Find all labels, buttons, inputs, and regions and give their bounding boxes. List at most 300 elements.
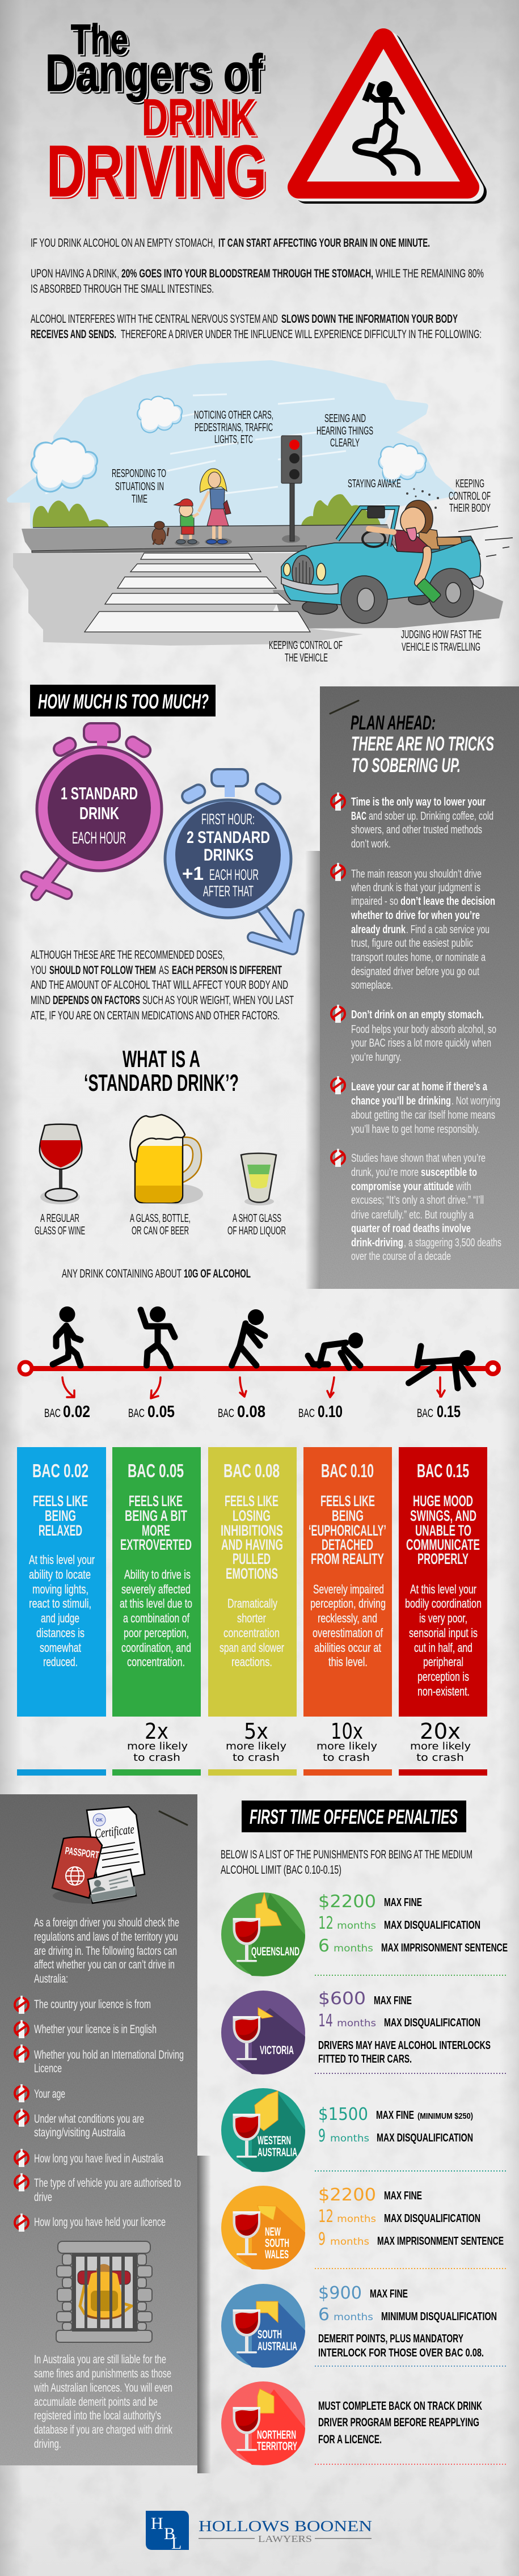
state: Queensland: $2200 [318,1892,376,1912]
recommended doses text: EACH PERSON IS DIFFERENT [172,964,282,977]
factors list: Your age [34,2088,65,2101]
female clock: one standard drink: DRINK [79,803,119,823]
foreign driver intro: are driving in. The following factors can [34,1945,177,1958]
column: BAC 0.05: Ability to drive is [124,1567,191,1582]
bushes [33,494,381,527]
recommended doses text: MIND [31,994,50,1007]
column: BAC 0.08 [208,1447,297,1717]
state: Victoria: FITTED TO THEIR CARS. [318,2053,412,2065]
crash: 5x [226,1719,286,1764]
icon: passport, certificate and licence: PASSPORT [64,1845,100,1861]
crash: 5x: to crash [233,1752,280,1764]
badge: New South Wales: SOUTH [265,2237,289,2250]
crash: 2x: 2x [145,1719,168,1744]
column: BAC 0.15: HUGE MOOD [413,1493,473,1510]
column: BAC 0.08: PULLED [233,1550,271,1567]
recommended doses text: ALTHOUGH THESE ARE THE RECOMMENDED DOSES, [31,948,225,962]
recommended doses text [31,948,294,1022]
tip: leave the car [331,1076,500,1136]
title: The [71,16,128,63]
heading: what is a standard drink: ‘STANDARD DRINK’? [84,1069,239,1096]
intro text: IS ABSORBED THROUGH THE SMALL INTESTINES. [31,283,214,296]
column: BAC 0.05: BAC 0.05 [128,1460,184,1481]
panel heading: PLAN AHEAD: [351,712,436,734]
column: BAC 0.05: at this level due to [120,1596,192,1610]
recommended doses text: YOU [31,964,47,977]
tip: leave the car: chance you’ll be drinking [351,1094,451,1107]
state: New South Wales: $2200 [318,2185,376,2205]
drink captions: GLASS OF WINE [35,1225,85,1237]
icon: wine glass [40,1124,82,1204]
scene labels: TIME [132,493,147,505]
column: BAC 0.08: BAC 0.08 [223,1460,280,1481]
column: BAC 0.05: BEING A BIT [125,1507,187,1524]
badge: Western Australia: AUSTRALIA [258,2146,297,2159]
column: BAC 0.05: MORE [142,1522,170,1539]
crosswalk [85,553,310,632]
factors list: Whether you hold an International Driving [34,2048,184,2061]
column: BAC 0.02: FEELS LIKE [33,1493,88,1510]
badge: Northern Territory: TERRITORY [257,2440,297,2453]
crash: 10x [317,1719,377,1764]
column: BAC 0.02: reduced. [43,1655,78,1669]
column: BAC 0.15: PROPERLY [417,1550,469,1567]
logo wordmark: LAWYERS [258,2533,312,2544]
column: BAC 0.08: FEELS LIKE [225,1493,279,1510]
column: BAC 0.08: span and slower [220,1641,284,1655]
factors list: How long you have held your licence [34,2216,166,2229]
crash: 20x: more likely [410,1740,471,1752]
badge: Northern Territory: NORTHERN [257,2429,296,2442]
crash: 20x: 20x [420,1719,461,1744]
column: BAC 0.10: this level. [328,1655,368,1669]
foreign driver liability text: same fines and punishments as those [34,2367,171,2380]
state: New South Wales: months [337,2214,376,2225]
column: BAC 0.02: ability to locate [29,1567,91,1582]
column: BAC 0.08: Dramatically [227,1596,277,1610]
column: BAC 0.15 [399,1447,487,1717]
factors list: Under what conditions you are [34,2113,144,2126]
tip: studies: compromise your attitude [351,1180,454,1193]
column: BAC 0.02: RELAXED [39,1522,82,1539]
BAC labels: 0.08 [237,1403,265,1421]
column: BAC 0.08: EMOTIONS [226,1565,278,1582]
badge: South Australia: SOUTH [258,2328,282,2341]
intro text: 20% GOES INTO YOUR BLOODSTREAM THROUGH THE STOMACH, [121,267,373,280]
colour key bars [17,1769,487,1776]
state: Queensland: months [334,1943,373,1954]
column: BAC 0.10: recklessly, and [318,1611,377,1625]
state: Victoria: $600 [318,1989,366,2009]
column: BAC 0.08: reactions. [231,1655,272,1669]
column: BAC 0.10: BAC 0.10 [321,1460,374,1481]
state: Queensland: 6 [318,1936,330,1956]
tip: studies: with [455,1180,471,1193]
column: BAC 0.15: SWINGS, AND [410,1507,476,1524]
column: BAC 0.15: BAC 0.15 [417,1460,469,1481]
foreign driver intro: regulations and laws of the territory you [34,1930,178,1943]
column: BAC 0.15: perception is [417,1669,469,1684]
BAC labels: 0.15 [437,1403,461,1421]
factors list: Whether your licence is in English [34,2023,157,2036]
badge: South Australia: AUSTRALIA [258,2340,297,2353]
scene labels: NOTICING OTHER CARS, [194,409,273,421]
state: Queensland: MAX FINE [384,1896,422,1909]
foreign driver liability text: database if you are charged with drink [34,2423,172,2436]
badge: Victoria: VICTORIA [260,2044,294,2057]
state: Western Australia: MAX FINE [376,2109,414,2122]
column: BAC 0.15: cut in half, and [414,1641,472,1655]
logo wordmark: HOLLOWS BOONEN [199,2518,372,2535]
icon: passport, certificate and licence [52,1807,145,1904]
warning sign: drunk stick figure [299,40,475,192]
tip: studies: quarter of road deaths involve [351,1222,471,1235]
figure: bac 0.05 [141,1306,175,1366]
column: BAC 0.05: severely affected [121,1582,191,1596]
state: Northern Territory: FOR A LICENCE. [318,2433,382,2446]
title: DRIVING [47,130,267,212]
recommended doses text: DEPENDS ON FACTORS [53,994,140,1007]
scene labels: CLEARLY [330,437,360,449]
state: Victoria: months [337,2018,376,2029]
column: BAC 0.10: FEELS LIKE [320,1493,375,1510]
state: Western Australia [221,2088,507,2172]
penalties intro [221,1848,472,1877]
column: BAC 0.15: UNABLE TO [415,1522,471,1539]
crash: 10x: more likely [317,1740,377,1752]
column: BAC 0.05: concentration. [127,1655,185,1669]
BAC labels [44,1403,461,1421]
foreign driver liability text: driving. [34,2438,61,2451]
state: Queensland: MAX DISQUALIFICATION [384,1919,480,1932]
intro text: IF YOU DRINK ALCOHOL ON AN EMPTY STOMACH, [31,237,215,250]
column: BAC 0.10: BEING [332,1507,364,1524]
male clock: two standard drinks: DRINKS [204,846,254,865]
scene labels: KEEPING [455,478,484,490]
badge: Northern Territory [221,2381,305,2465]
tip: judgment: someplace. [351,979,393,992]
tip: time [331,792,493,850]
tip: time: BAC [351,810,366,823]
foreign driver liability text: accumulate demerit points and be [34,2396,158,2409]
state: New South Wales: MAX FINE [384,2190,422,2202]
crash: 20x [410,1719,471,1764]
crash: 5x: 5x [244,1719,268,1744]
badge: South Australia [221,2284,305,2368]
logo mark: B [164,2524,175,2543]
scene labels: KEEPING CONTROL OF [269,639,343,652]
column: BAC 0.15: COMMUNICATE [406,1536,480,1553]
column: BAC 0.05 [112,1447,201,1717]
BAC labels: 0.05 [147,1403,175,1421]
factors list: The type of vehicle you are authorised to [34,2177,181,2190]
tip: studies: drink-driving [351,1236,403,1249]
state: South Australia: MAX FINE [370,2288,408,2300]
column: BAC 0.08: LOSING [233,1507,271,1524]
intro text: RECEIVES AND SENDS. [31,328,116,341]
state: South Australia: $900 [318,2283,362,2303]
column: BAC 0.10: Severely impaired [313,1582,384,1596]
state: New South Wales: MAX DISQUALIFICATION [384,2212,480,2225]
penalties intro: ALCOHOL LIMIT (BAC 0.10-0.15) [221,1864,341,1877]
state: Northern Territory [221,2381,507,2465]
drink captions [35,1212,286,1237]
column: BAC 0.15: peripheral [423,1655,463,1669]
column: BAC 0.02: BEING [45,1507,76,1524]
tip: judgment: already drunk [351,923,406,936]
crash: 20x: to crash [416,1752,464,1764]
logo wordmark [199,2518,372,2544]
female clock: one standard drink [26,723,162,895]
column: BAC 0.08: shorter [237,1611,266,1625]
female clock: one standard drink: EACH HOUR [72,829,126,848]
foreign driver intro: As a foreign driver you should check the [34,1916,179,1929]
scene labels: RESPONDING TO [112,467,166,480]
column: BAC 0.02: At this level your [29,1553,95,1567]
title: DRINK [142,89,256,146]
scene labels: HEARING THINGS [317,425,373,437]
state: Queensland: months [337,1920,376,1932]
title [45,16,267,212]
badge: New South Wales: WALES [265,2248,289,2261]
icon: beer mug [130,1115,203,1204]
figure: bac 0.08 [231,1309,265,1365]
male clock: two standard drinks: +1 [182,863,204,884]
female clock: one standard drink: 1 STANDARD [61,783,138,803]
column: BAC 0.05: EXTROVERTED [120,1536,192,1553]
male clock: two standard drinks: AFTER THAT [203,883,254,900]
crash: 2x: to crash [133,1752,180,1764]
tip: studies: over the course of a decade [351,1250,451,1263]
state: Victoria [221,1989,507,2075]
state: Western Australia: 9 [318,2126,326,2146]
badge: Queensland: QUEENSLAND [251,1945,299,1958]
crash: 10x: to crash [323,1752,370,1764]
state: Victoria: MAX FINE [374,1995,412,2007]
tip: studies: drive carefully.” etc. But roughly a [351,1208,474,1221]
tip: judgment [331,863,495,992]
male clock: two standard drinks: FIRST HOUR: [201,811,255,828]
title: Dangers of [45,44,263,102]
car and driver [281,488,513,623]
street scene illustration [10,363,513,664]
BAC labels: BAC [218,1407,234,1420]
column: BAC 0.02: react to stimuli, [29,1596,91,1610]
column: BAC 0.10 [303,1447,392,1717]
BAC labels: 0.10 [318,1403,343,1421]
factors list: How long you have lived in Australia [34,2152,163,2165]
heading: what is a standard drink [84,1045,239,1096]
column: BAC 0.10: abilities occur at [314,1641,381,1655]
logo mark: H [151,2514,163,2533]
state: Western Australia: $1500 [318,2105,368,2124]
crash: 2x: more likely [127,1740,188,1752]
drink captions: OR CAN OF BEER [132,1225,189,1237]
drink captions: A SHOT GLASS [233,1212,281,1225]
column: BAC 0.15: sensorial input is [409,1626,478,1640]
male clock: two standard drinks: EACH HOUR [209,866,259,883]
column: BAC 0.15: At this level your [410,1582,476,1596]
column: BAC 0.08: INHIBITIONS [221,1522,283,1539]
column: BAC 0.10: perception, driving [310,1596,386,1610]
clouds [31,439,98,492]
foreign driver intro: Australia: [34,1972,68,1985]
state: Western Australia: (MINIMUM $250) [417,2111,473,2121]
BAC labels: BAC [128,1407,145,1420]
recommended doses text: AND THE AMOUNT OF ALCOHOL THAT WILL AFFECT YOUR BODY AND [31,979,288,992]
sky blob [10,363,453,562]
state: Western Australia: months [330,2133,369,2144]
tip: studies: susceptible to [421,1166,477,1179]
BAC labels: BAC [417,1407,433,1420]
column: BAC 0.02: moving lights, [32,1582,88,1596]
recommended doses text: SHOULD NOT FOLLOW THEM [49,964,156,977]
BAC timeline [19,1306,499,1421]
timeline bar [19,1362,499,1375]
column: BAC 0.08: AND HAVING [221,1536,283,1553]
factors list: drive [34,2191,52,2204]
tip: studies: drunk, you’re more [351,1166,419,1179]
state: Victoria: MAX DISQUALIFICATION [384,2017,480,2029]
stick figures [53,1306,475,1388]
heading: how much is too much: HOW MUCH IS TOO MUCH? [38,690,209,713]
badge: New South Wales: NEW [265,2225,281,2238]
column: BAC 0.15: bodily coordination [405,1596,482,1610]
scene labels: LIGHTS, ETC [214,433,253,446]
state: Queensland: 12 [318,1913,334,1933]
foreign driver intro [34,1916,179,1985]
state: Western Australia: MAX DISQUALIFICATION [377,2132,473,2144]
figure: bac 0.10 [308,1333,363,1368]
logo mark: L [171,2534,182,2553]
intro text: UPON HAVING A DRINK, [31,267,119,280]
state: Queensland [221,1892,508,1976]
column: BAC 0.05: a combination of [123,1611,190,1625]
icon: shot glass [241,1153,276,1205]
icon: passport, certificate and licence: Certificate [94,1822,135,1841]
standard drink definition: 10G OF ALCOHOL [184,1267,251,1280]
scene labels: PEDESTRIANS, TRAFFIC [195,421,273,434]
column: BAC 0.10: DETACHED [322,1536,373,1553]
icon: passport, certificate and licence: OK [96,1818,103,1823]
recommended doses text: AS [159,964,169,977]
heading: what is a standard drink: WHAT IS A [123,1045,200,1072]
foreign driver liability text: with Australian licences. You will even [33,2381,172,2394]
panel: plan ahead [305,686,519,1289]
male clock: two standard drinks: 2 STANDARD [187,828,270,847]
column: BAC 0.15: non-existent. [417,1684,470,1698]
factors list: staying/visiting Australia [34,2126,125,2139]
state: South Australia: 6 [318,2305,330,2325]
column: BAC 0.02: somewhat [40,1641,81,1655]
male clock: two standard drinks [165,769,299,950]
column: BAC 0.02: BAC 0.02 [32,1460,88,1481]
intro text: ALCOHOL INTERFERES WITH THE CENTRAL NERVOUS SYSTEM AND [31,313,278,326]
badge: Victoria [221,1991,305,2075]
heading: how much is too much [30,685,216,716]
icon: backpack behind bars [56,2241,152,2342]
tip: empty stomach: you’re hungry. [351,1051,402,1064]
crash: 2x [127,1719,188,1764]
logo mark [146,2511,189,2553]
traffic light [281,436,302,543]
badge: Queensland [221,1892,305,1976]
factors list [15,1996,184,2232]
badge: Western Australia [221,2088,305,2172]
tip: judgment: trust, figure out the easiest public [351,937,473,950]
column: BAC 0.10: ‘EUPHORICALLY’ [309,1522,386,1539]
scene labels: STAYING AWAKE [348,478,401,490]
intro text [31,237,484,341]
drink captions: A REGULAR [40,1212,79,1225]
badge: New South Wales [221,2186,305,2270]
column: BAC 0.10: overestimation of [313,1626,383,1640]
column: BAC 0.15: is very poor, [419,1611,467,1625]
state: South Australia: months [334,2312,373,2323]
scene labels [112,409,491,664]
state: South Australia [221,2283,507,2368]
foreign driver liability text: registered into the local authority’s [34,2409,161,2422]
column: BAC 0.05: coordination, and [121,1641,191,1655]
scene labels: THE VEHICLE [285,652,328,664]
crash: 5x: more likely [226,1740,286,1752]
recommended doses text: SUCH AS YOUR WEIGHT, WHEN YOU LAST [142,994,294,1007]
state: New South Wales: 12 [318,2207,334,2227]
tip: judgment: impaired - so [351,895,398,908]
tip: empty stomach [331,1005,496,1064]
scene labels: SITUATIONS IN [115,480,164,493]
BAC labels: BAC [44,1407,61,1420]
drink captions: A GLASS, BOTTLE, [130,1212,191,1225]
column: BAC 0.05: FEELS LIKE [129,1493,183,1510]
column: BAC 0.02: and judge [41,1611,79,1625]
tip: studies [331,1149,501,1263]
column: BAC 0.08: concentration [223,1626,280,1640]
column: BAC 0.02 [17,1447,106,1717]
scene labels: SEEING AND [324,412,366,425]
pedestrians and dog [152,469,232,546]
state: New South Wales: months [330,2236,369,2248]
scene labels: THEIR BODY [449,502,491,515]
figure: bac 0.02 [53,1306,81,1365]
BAC labels: BAC [298,1407,315,1420]
state: New South Wales: 9 [318,2229,326,2249]
foreign driver liability text: In Australia you are still liable for the [34,2353,166,2366]
standard drink definition: ANY DRINK CONTAINING ABOUT [62,1267,182,1280]
tip: time: don’t work. [351,837,391,850]
column: BAC 0.10: FROM REALITY [311,1550,384,1567]
badge: Western Australia: WESTERN [258,2134,291,2147]
heading: first time offence penalties [242,1801,466,1832]
drink captions: OF HARD LIQUOR [227,1225,286,1237]
figure: bac 0.15 [408,1346,475,1388]
factors list: The country your licence is from [34,1998,151,2011]
logo: Hollows Boonen Lawyers [146,2511,372,2553]
crash: 10x: 10x [331,1719,363,1744]
state: New South Wales [221,2185,507,2270]
column: BAC 0.02: distances is [36,1626,85,1640]
foreign driver intro: affect whether you can or can’t drive in [34,1958,175,1971]
foreign driver liability text [33,2353,172,2451]
column: BAC 0.05: poor perception, [124,1626,189,1640]
panel heading [351,712,494,777]
factors list: Licence [34,2062,62,2075]
panel: foreign drivers [0,1794,211,2473]
BAC labels: 0.02 [63,1403,90,1421]
state: Victoria: 14 [318,2011,333,2031]
crash likelihood labels [127,1719,471,1764]
road and sidewalk [13,553,363,646]
